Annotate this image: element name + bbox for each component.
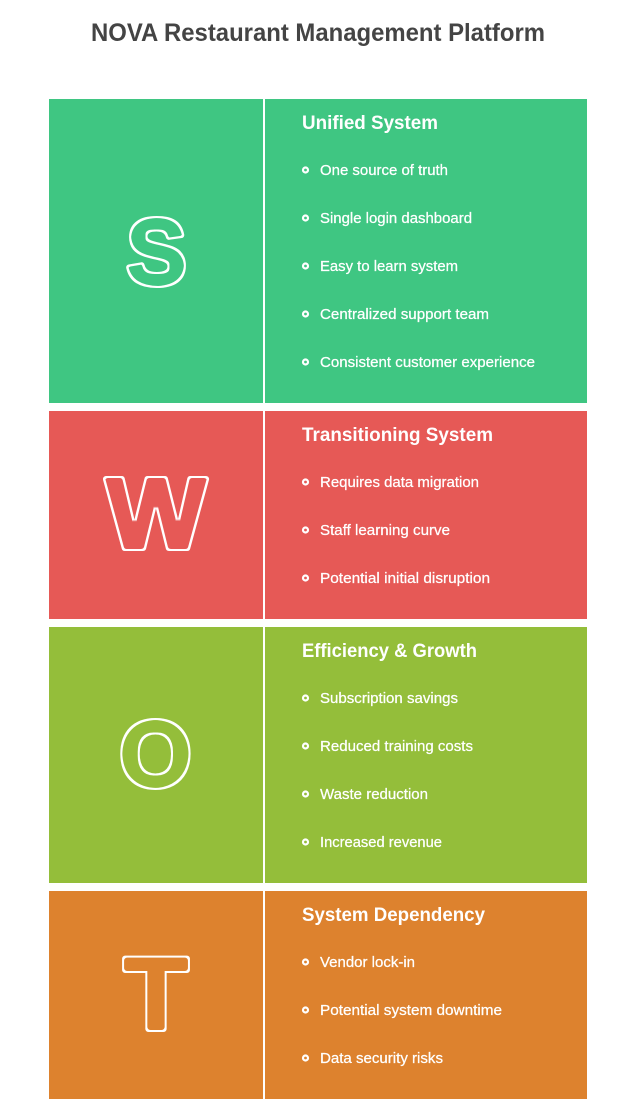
weaknesses content block bbox=[265, 411, 587, 619]
opportunities list: Waste reduction bbox=[320, 787, 428, 803]
strengths content block bbox=[265, 99, 587, 403]
weaknesses list: Potential initial disruption bbox=[320, 571, 490, 587]
weaknesses list: Requires data migration bbox=[320, 475, 479, 491]
opportunities letter block bbox=[49, 627, 263, 883]
title: NOVA Restaurant Management Platform bbox=[91, 19, 545, 47]
heading: System Dependency: System Dependency bbox=[302, 905, 485, 926]
strengths letter block bbox=[49, 99, 263, 403]
opportunities list: Reduced training costs bbox=[320, 739, 473, 755]
heading: Transitioning System: Transitioning System bbox=[302, 425, 493, 446]
opportunities list bbox=[303, 691, 473, 851]
letter O: O bbox=[120, 702, 192, 806]
weaknesses letter block bbox=[49, 411, 263, 619]
strengths list: Easy to learn system bbox=[320, 259, 458, 275]
heading: Efficiency & Growth: Efficiency & Growth bbox=[302, 641, 477, 662]
threats list: Vendor lock-in bbox=[320, 955, 415, 971]
strengths list: Centralized support team bbox=[320, 307, 489, 323]
opportunities list: Increased revenue bbox=[320, 835, 442, 851]
heading: Unified System: Unified System bbox=[302, 113, 438, 134]
opportunities list: Subscription savings bbox=[320, 691, 458, 707]
strengths list bbox=[303, 163, 535, 371]
strengths list: One source of truth bbox=[320, 163, 448, 179]
threats list: Potential system downtime bbox=[320, 1003, 502, 1019]
threats content block bbox=[265, 891, 587, 1099]
panel: opportunities bbox=[49, 627, 587, 883]
panel: strengths bbox=[49, 99, 587, 403]
threats letter block bbox=[49, 891, 263, 1099]
panel: weaknesses bbox=[49, 411, 587, 619]
threats list bbox=[303, 955, 502, 1067]
opportunities content block bbox=[265, 627, 587, 883]
panel: threats bbox=[49, 891, 587, 1099]
weaknesses list bbox=[303, 475, 490, 587]
letter T: T bbox=[124, 937, 188, 1051]
threats list: Data security risks bbox=[320, 1051, 443, 1067]
weaknesses list: Staff learning curve bbox=[320, 523, 450, 539]
strengths list: Consistent customer experience bbox=[320, 355, 535, 371]
letter W: W bbox=[106, 458, 207, 570]
letter S: S bbox=[126, 200, 186, 304]
strengths list: Single login dashboard bbox=[320, 211, 472, 227]
